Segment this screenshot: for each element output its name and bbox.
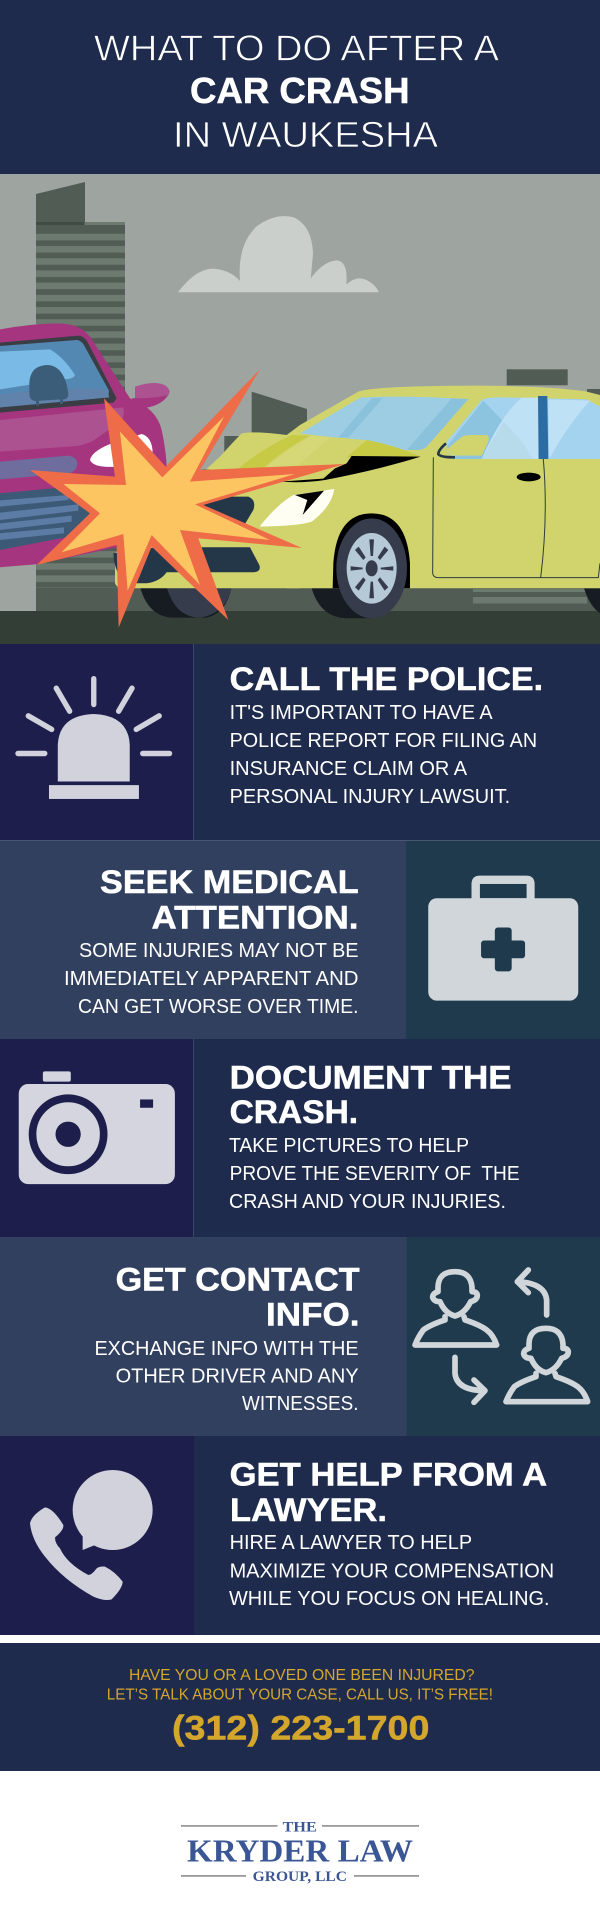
call to action banner: HAVE YOU OR A LOVED ONE BEEN INJURED? bbox=[129, 1667, 475, 1684]
heading and text: CRASH AND YOUR INJURIES. bbox=[229, 1191, 506, 1213]
heading and text: IMMEDIATELY APPARENT AND bbox=[64, 968, 358, 990]
heading and text: WITNESSES. bbox=[242, 1393, 358, 1415]
heading and text: CAN GET WORSE OVER TIME. bbox=[78, 996, 358, 1018]
door lines bbox=[433, 457, 600, 578]
panel: document the crash bbox=[0, 1039, 600, 1237]
icon: first aid kit bbox=[428, 876, 578, 1001]
heading and text: TAKE PICTURES TO HELP bbox=[229, 1135, 469, 1157]
heading and text: GET HELP FROM A bbox=[230, 1457, 547, 1493]
header: title: CAR CRASH bbox=[190, 70, 410, 111]
header: title: IN WAUKESHA bbox=[173, 114, 438, 155]
heading and text: CRASH. bbox=[230, 1094, 358, 1130]
icon: camera bbox=[19, 1071, 175, 1184]
heading and text: CALL THE POLICE. bbox=[230, 661, 543, 697]
yellow car bbox=[113, 386, 600, 618]
front wheel bbox=[140, 587, 232, 618]
panel: call the police bbox=[0, 644, 600, 840]
icon: siren bbox=[18, 679, 170, 799]
panel: seek medical attention bbox=[0, 840, 600, 1039]
heading and text: PERSONAL INJURY LAWSUIT. bbox=[230, 786, 510, 808]
left building bbox=[36, 182, 125, 611]
heading and text: SEEK MEDICAL bbox=[100, 864, 359, 900]
heading and text: INFO. bbox=[266, 1296, 360, 1332]
heading and text: PROVE THE SEVERITY OF THE bbox=[230, 1163, 520, 1185]
heading and text: MAXIMIZE YOUR COMPENSATION bbox=[230, 1561, 554, 1583]
call to action banner bbox=[0, 1643, 600, 1771]
header: title: WHAT TO DO AFTER A bbox=[94, 28, 499, 68]
heading and text: ATTENTION. bbox=[152, 900, 358, 936]
logo: the kryder law group: GROUP, LLC bbox=[253, 1869, 347, 1885]
icon: exchange contacts bbox=[415, 1270, 588, 1402]
heading and text: GET CONTACT bbox=[116, 1262, 360, 1298]
logo: the kryder law group bbox=[181, 1820, 419, 1885]
call to action banner: LET’S TALK ABOUT YOUR CASE, CALL US, IT’S FREE! bbox=[107, 1686, 493, 1704]
heading and text: EXCHANGE INFO WITH THE bbox=[94, 1338, 358, 1360]
background buildings right bbox=[36, 369, 600, 611]
panel: get contact info bbox=[0, 1237, 600, 1436]
heading and text: OTHER DRIVER AND ANY bbox=[116, 1366, 359, 1388]
cloud bbox=[178, 216, 379, 292]
crumpled hood and headlight bbox=[220, 432, 421, 527]
illustration: car crash scene bbox=[0, 174, 600, 644]
heading and text bbox=[94, 1262, 360, 1415]
heading and text: WHILE YOU FOCUS ON HEALING. bbox=[229, 1588, 550, 1610]
heading and text bbox=[229, 1059, 520, 1213]
heading and text: IT'S IMPORTANT TO HAVE A bbox=[230, 702, 493, 724]
heading and text: POLICE REPORT FOR FILING AN bbox=[230, 730, 537, 752]
heading and text bbox=[64, 864, 359, 1018]
panel: get help from a lawyer bbox=[0, 1436, 600, 1635]
heading and text: INSURANCE CLAIM OR A bbox=[230, 758, 468, 780]
heading and text bbox=[229, 1457, 554, 1610]
side windows bbox=[447, 397, 600, 459]
call to action banner: (312) 223-1700 bbox=[172, 1710, 429, 1748]
heading and text: HIRE A LAWYER TO HELP bbox=[230, 1532, 472, 1554]
heading and text bbox=[230, 661, 543, 808]
magenta car bbox=[0, 323, 170, 567]
heading and text: DOCUMENT THE bbox=[230, 1059, 512, 1095]
heading and text: SOME INJURIES MAY NOT BE bbox=[79, 940, 358, 962]
explosion star bbox=[30, 369, 345, 628]
logo: the kryder law group: KRYDER LAW bbox=[187, 1833, 413, 1869]
wheel bbox=[333, 513, 410, 588]
header: title bbox=[0, 0, 600, 174]
heading and text: LAWYER. bbox=[230, 1492, 387, 1528]
logo: the kryder law group: THE bbox=[283, 1820, 317, 1836]
icon: phone with speech bubble bbox=[30, 1470, 153, 1600]
